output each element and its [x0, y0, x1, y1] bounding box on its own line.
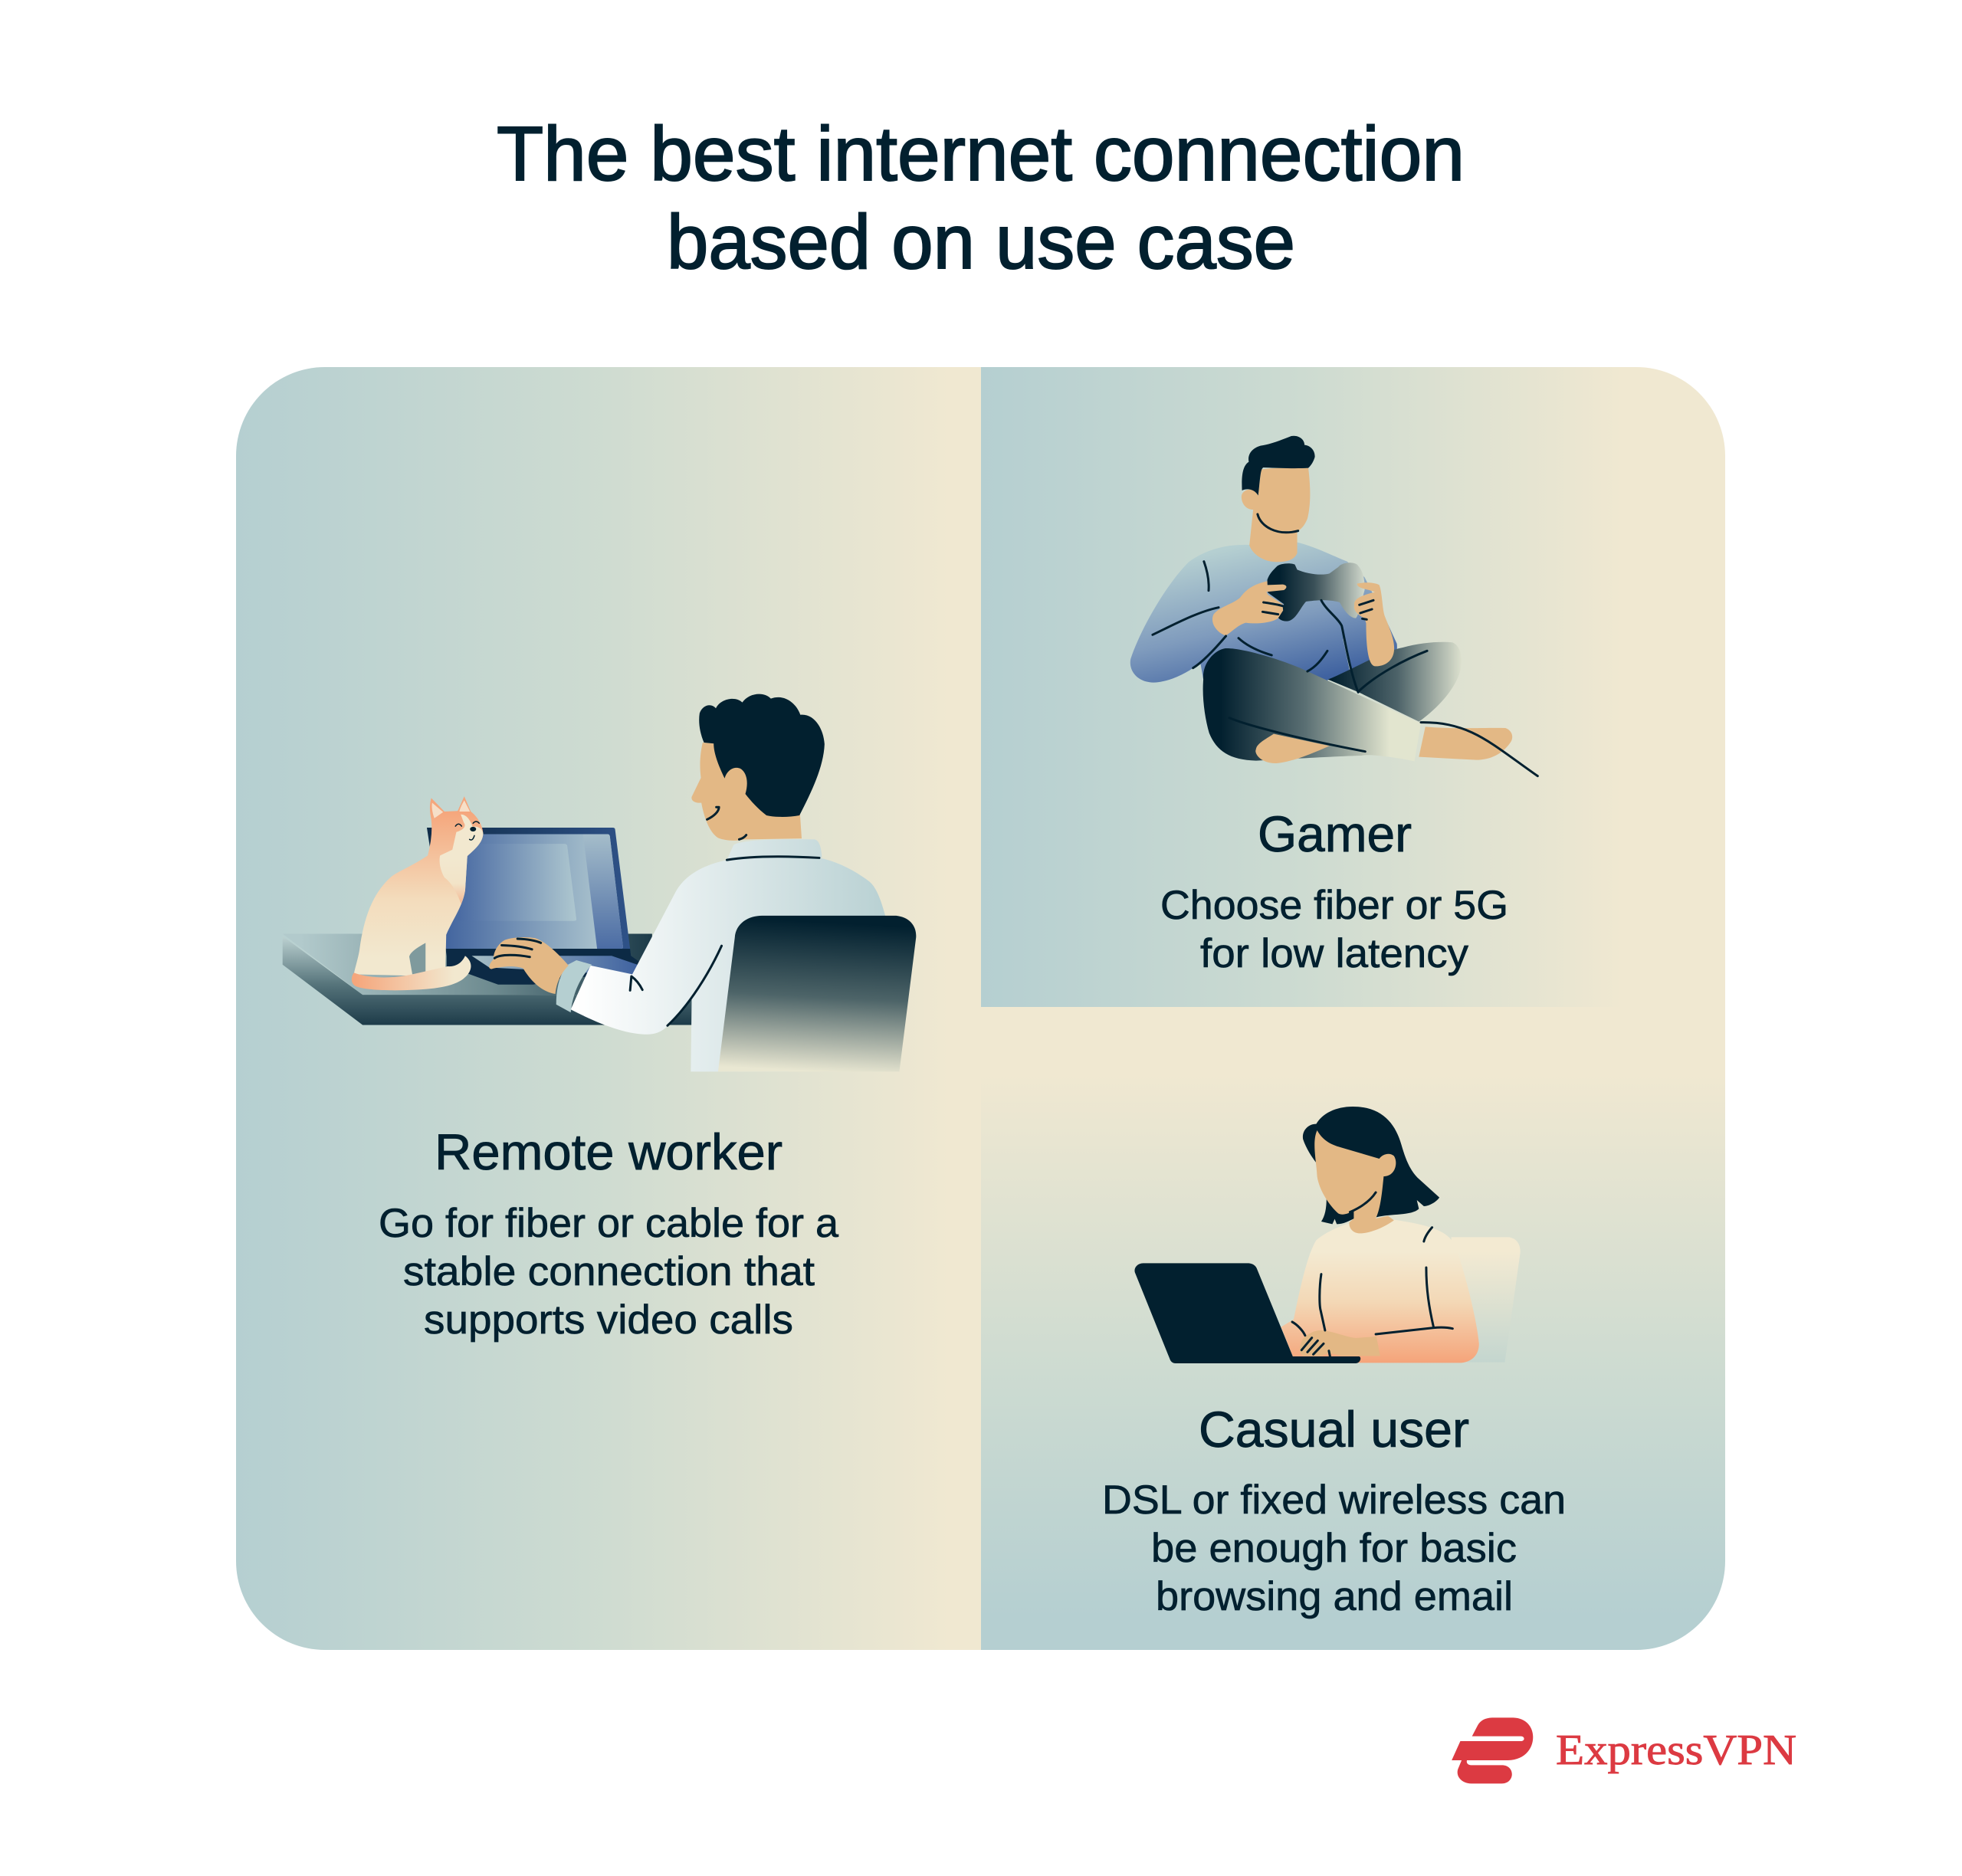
face	[1314, 1130, 1396, 1233]
panel grid background	[236, 367, 1726, 1650]
far leg	[1328, 642, 1462, 722]
cuff	[556, 960, 592, 1012]
shirt	[571, 839, 885, 1071]
clothing and finger lines	[1153, 562, 1537, 776]
laptop	[1134, 1263, 1360, 1363]
title	[497, 111, 1465, 285]
near leg	[1203, 648, 1421, 761]
hair	[1303, 1107, 1439, 1224]
body text: gamer: Choose fiber or 5G	[1160, 883, 1508, 928]
body text: gamer	[1160, 883, 1508, 976]
heading: gamer: Gamer	[1258, 805, 1412, 862]
laptop	[427, 828, 642, 985]
head and neck	[1242, 436, 1315, 562]
collar	[630, 857, 819, 1025]
panel: casual user	[1102, 1107, 1566, 1619]
illustration: gamer sitting cross-legged	[1130, 436, 1537, 776]
right foot	[1419, 726, 1512, 760]
cat	[352, 796, 483, 990]
chair	[1451, 1237, 1521, 1363]
left foot	[1255, 734, 1330, 763]
title: The best internet connection	[497, 111, 1465, 197]
body text: casual user: DSL or fixed wireless can	[1102, 1478, 1566, 1523]
illustration: remote worker with cat at desk	[283, 694, 916, 1071]
heading: casual user: Casual user	[1199, 1401, 1469, 1458]
controller	[1268, 562, 1365, 622]
head	[691, 694, 825, 841]
panel: gamer	[1130, 436, 1537, 976]
body text: casual user: be enough for basic	[1151, 1526, 1517, 1571]
body text: remote worker: Go for fiber or cable for a	[379, 1201, 839, 1246]
body text: casual user: browsing and email	[1156, 1574, 1513, 1619]
body text: remote worker: supports video calls	[424, 1297, 793, 1343]
body text: gamer: for low latency	[1200, 931, 1469, 976]
wordmark: ExpressVPN	[1556, 1727, 1796, 1774]
right hand	[1354, 582, 1394, 666]
icon: ExpressVPN mark	[1452, 1717, 1533, 1783]
logo: ExpressVPN	[1452, 1717, 1796, 1783]
sweater	[1281, 1220, 1479, 1363]
title: based on use case	[667, 199, 1295, 285]
clothing and finger lines	[1292, 1228, 1452, 1356]
panel: remote worker	[283, 694, 916, 1343]
body text: casual user	[1102, 1478, 1566, 1619]
hand	[1300, 1330, 1380, 1356]
chair	[718, 916, 916, 1071]
heading: remote worker: Remote worker	[435, 1123, 783, 1180]
left hand	[1212, 581, 1286, 635]
hand	[489, 937, 569, 994]
body text: remote worker	[379, 1201, 839, 1343]
illustration: casual user on laptop	[1134, 1107, 1521, 1363]
body text: remote worker: stable connection that	[403, 1249, 815, 1294]
desk	[283, 934, 694, 1025]
sweater	[1130, 543, 1397, 683]
